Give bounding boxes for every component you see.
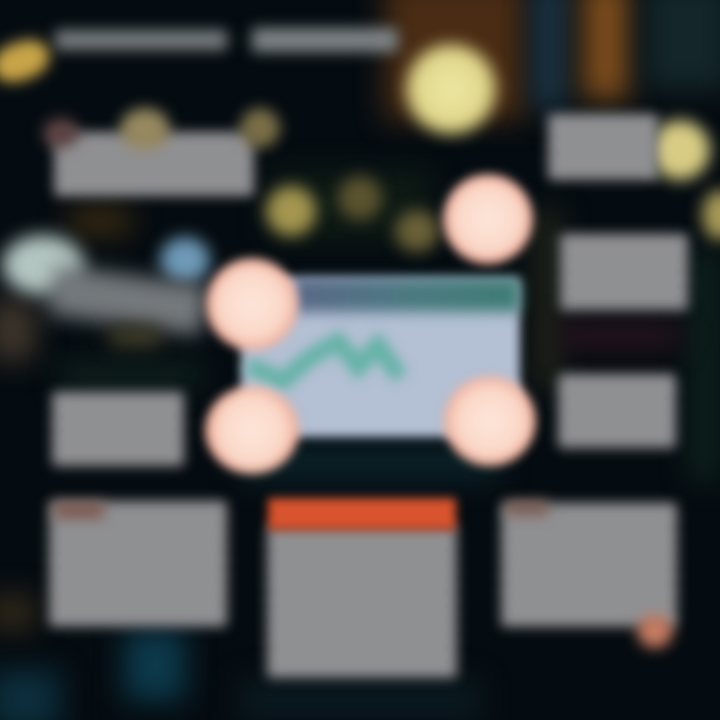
panel: upper right text [548, 114, 658, 180]
icon: logo glow top left [0, 33, 55, 89]
panel: left lower text [52, 392, 184, 466]
panel: bottom left card [40, 490, 236, 636]
panel: right middle text [560, 234, 688, 310]
icon: yellow light far right [702, 190, 720, 240]
panel: upper left text [54, 132, 254, 196]
icon: large yellow light [406, 44, 496, 134]
icons: small yellow lights [255, 168, 446, 261]
icon: pink circle left upper [206, 258, 298, 350]
orange header [268, 498, 456, 530]
icon: pink circle right [444, 376, 536, 466]
icon: pink circle left lower [205, 386, 299, 474]
dashboard header [293, 278, 520, 312]
icon row above upper left panel [36, 98, 288, 156]
panel: central dashboard [233, 268, 530, 445]
panel: right lower text [558, 374, 676, 448]
panel: left cloud banner [0, 221, 222, 356]
panel: bottom center card [258, 490, 466, 686]
line chart [240, 326, 411, 395]
icon: pink circle top [443, 174, 533, 264]
icon: small pink badge [637, 614, 673, 648]
panel: bottom right card [492, 491, 686, 636]
title [46, 18, 407, 62]
icon: yellow light right [650, 120, 710, 180]
